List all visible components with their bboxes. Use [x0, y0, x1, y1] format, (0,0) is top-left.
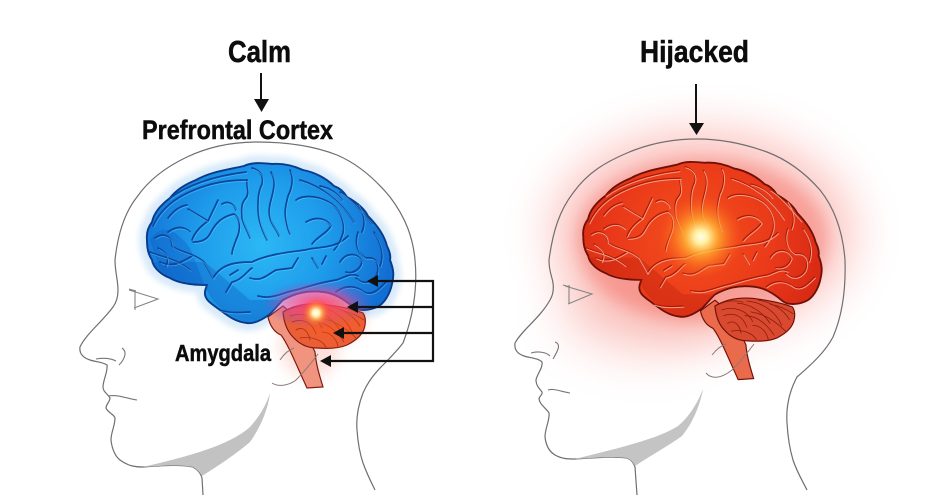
amygdala glow: [262, 280, 374, 339]
nose and lip details: calm: [96, 348, 137, 400]
bracket arrows: [320, 275, 433, 367]
red glow around head: [552, 132, 852, 356]
arrow: hijacked: [689, 84, 704, 135]
jaw line: hijacked: [706, 344, 754, 377]
panel: hijacked brain side: [515, 34, 852, 495]
title: calm: Calm: [228, 34, 291, 69]
glowing hot spot: [659, 195, 743, 279]
neck shadow: hijacked: [575, 389, 703, 466]
label: prefrontal cortex: Prefrontal Cortex: [142, 115, 333, 145]
label: amygdala: Amygdala: [175, 340, 271, 366]
neck shadow: calm: [143, 393, 270, 476]
brain: calm: [147, 163, 393, 388]
title: hijacked: Hijacked: [640, 34, 749, 69]
panel: calm brain side: [80, 34, 433, 495]
eye: hijacked: [563, 285, 592, 304]
brain: hijacked: [583, 162, 822, 380]
arrow: calm: [254, 73, 269, 112]
head outline: calm: [80, 142, 416, 495]
jaw line: calm: [272, 348, 318, 385]
eye: calm: [129, 289, 158, 310]
head outline: hijacked: [515, 139, 845, 495]
blue halo: [147, 163, 393, 323]
nose and lip details: hijacked: [531, 342, 570, 393]
